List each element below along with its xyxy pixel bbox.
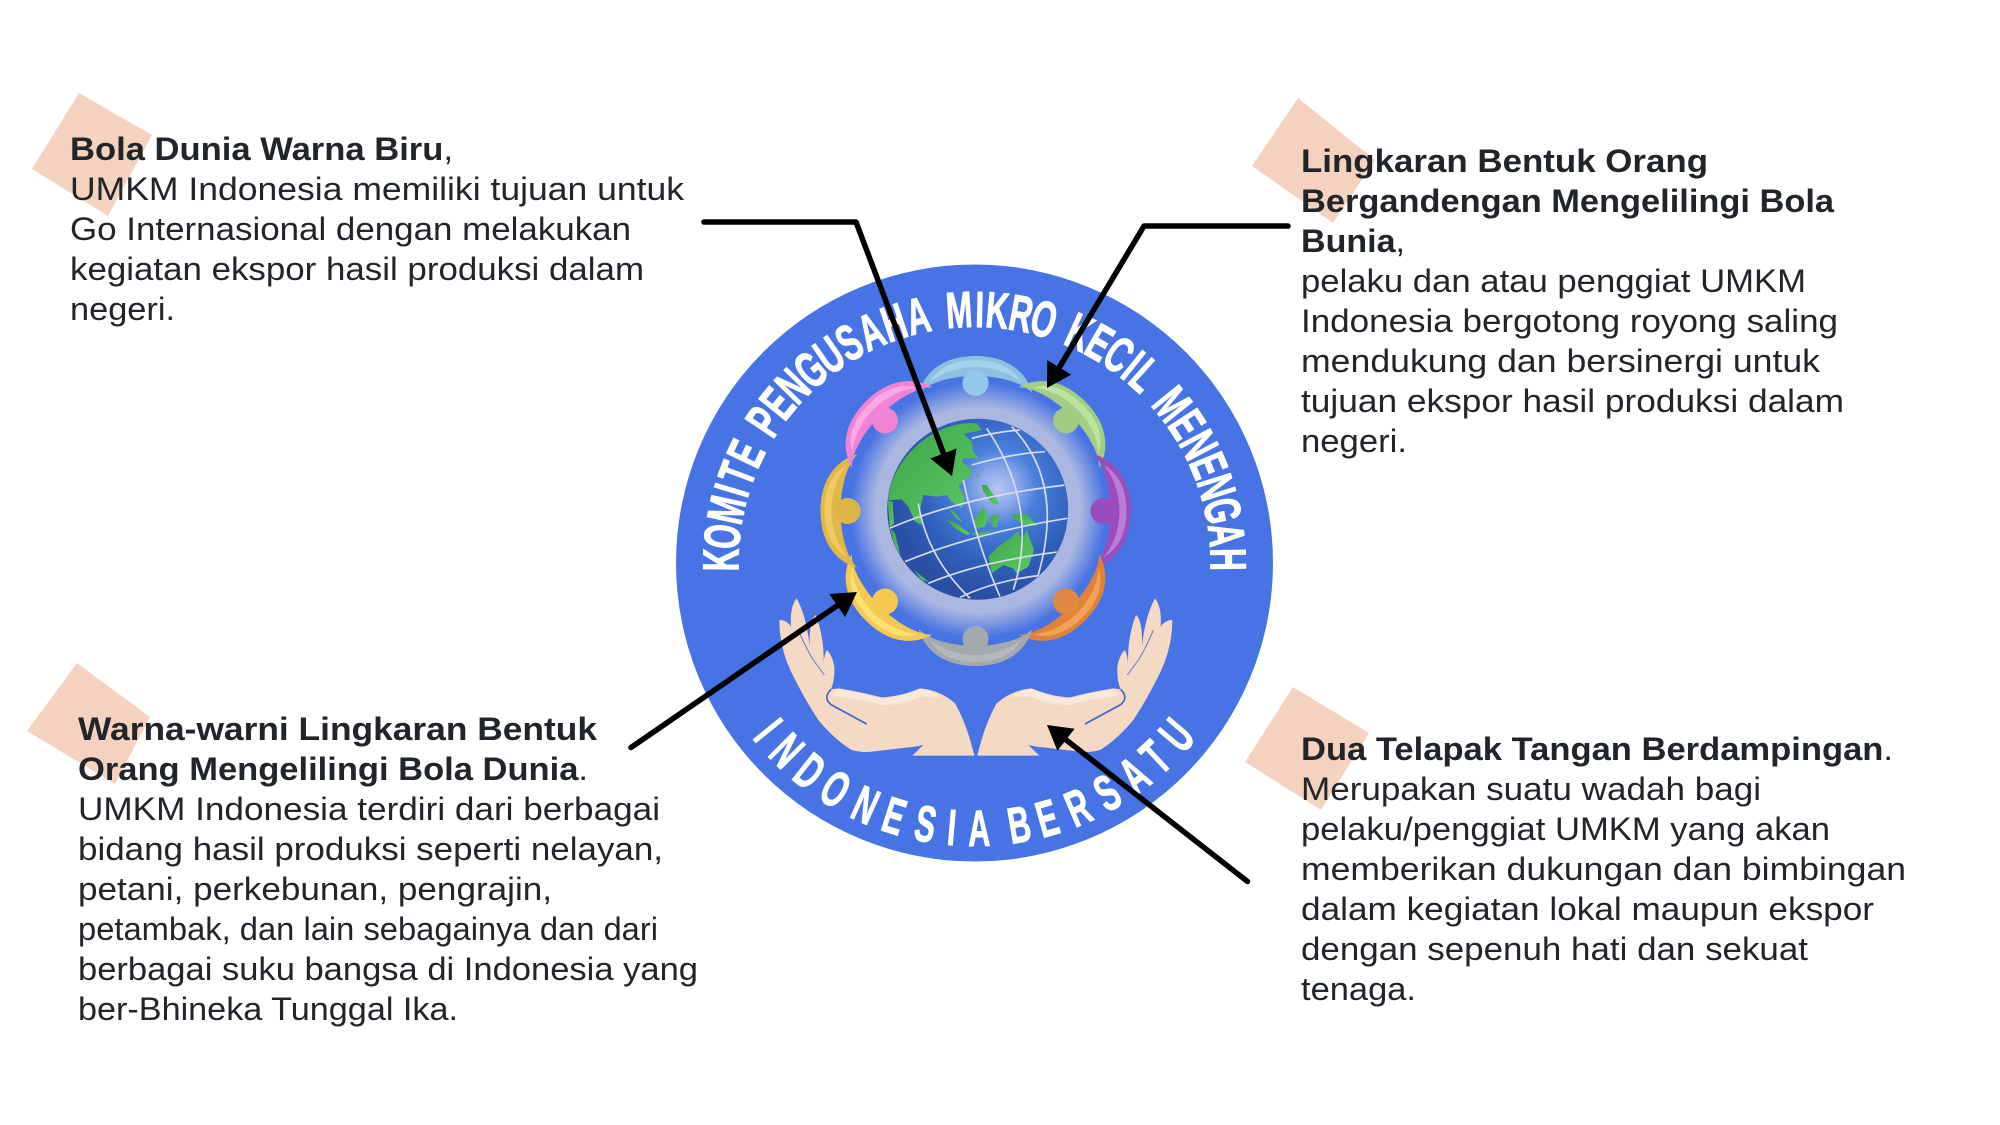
curved title: KOMITE PENGUSAHA MIKRO KECIL MENENGAH: A xyxy=(900,286,935,346)
text block: Warna-warni Lingkaran: petambak, dan lain sebagainya dan dari xyxy=(78,911,658,947)
decorative diamond: top right xyxy=(1252,98,1375,223)
text block: Warna-warni Lingkaran: Orang Mengelilingi Bola Dunia . xyxy=(78,751,588,787)
curved title: KOMITE PENGUSAHA MIKRO KECIL MENENGAH: S xyxy=(826,313,872,372)
text block: Lingkaran Bentuk Orang: Indonesia bergotong royong saling xyxy=(1301,303,1838,339)
curved title: INDONESIA BERSATU: I xyxy=(945,799,958,856)
curved title: KOMITE PENGUSAHA MIKRO KECIL MENENGAH: N xyxy=(1186,468,1247,507)
curved title: KOMITE PENGUSAHA MIKRO KECIL MENENGAH: N xyxy=(1168,422,1229,468)
curved title: INDONESIA BERSATU: A xyxy=(1108,746,1160,804)
text block: Lingkaran Bentuk Orang: Bergandengan Mengelilingi Bola xyxy=(1301,183,1834,219)
curved title: KOMITE PENGUSAHA MIKRO KECIL MENENGAH: E xyxy=(1178,445,1239,486)
curved title: KOMITE PENGUSAHA MIKRO KECIL MENENGAH: E xyxy=(1077,313,1123,372)
curved title: INDONESIA BERSATU: E xyxy=(876,786,913,846)
curved title: INDONESIA BERSATU: O xyxy=(810,759,860,820)
icon: ring of people xyxy=(820,356,1130,666)
curved title: KOMITE PENGUSAHA MIKRO KECIL MENENGAH: I xyxy=(703,478,760,503)
curved title: KOMITE PENGUSAHA MIKRO KECIL MENENGAH: O xyxy=(1024,289,1063,350)
text block: Lingkaran Bentuk Orang: negeri. xyxy=(1301,423,1407,459)
curved title: KOMITE PENGUSAHA MIKRO KECIL MENENGAH: O xyxy=(693,521,752,552)
icon: two open hands xyxy=(779,598,1172,756)
text block: Warna-warni Lingkaran: UMKM Indonesia terdiri dari berbagai xyxy=(78,791,660,827)
curved title: KOMITE PENGUSAHA MIKRO KECIL MENENGAH: R xyxy=(1005,284,1038,344)
curved title: KOMITE PENGUSAHA MIKRO KECIL MENENGAH: H xyxy=(874,292,914,353)
curved title: INDONESIA BERSATU: B xyxy=(1004,795,1035,855)
curved title: KOMITE PENGUSAHA MIKRO KECIL MENENGAH: T xyxy=(707,455,767,493)
curved title: INDONESIA BERSATU: I xyxy=(743,709,793,751)
curved title: KOMITE PENGUSAHA MIKRO KECIL MENENGAH: K xyxy=(1057,302,1102,363)
curved title: INDONESIA BERSATU: A xyxy=(968,800,991,857)
arrow: to globe xyxy=(704,222,957,476)
curved title: INDONESIA BERSATU: U xyxy=(1148,708,1205,762)
arrow: to people ring xyxy=(1047,226,1288,388)
text block: Dua Telapak Tangan: dalam kegiatan lokal maupun ekspor xyxy=(1301,891,1874,927)
text block: Lingkaran Bentuk Orang: tujuan ekspor hasil produksi dalam xyxy=(1301,383,1844,419)
text block: Bola Dunia Warna Biru: kegiatan ekspor hasil produksi dalam xyxy=(70,251,644,287)
text block: Dua Telapak Tangan xyxy=(1301,731,1906,1007)
curved title: KOMITE PENGUSAHA MIKRO KECIL MENENGAH xyxy=(693,281,1256,572)
text block: Warna-warni Lingkaran: Warna-warni Lingkaran Bentuk xyxy=(78,711,597,747)
curved title: INDONESIA BERSATU: N xyxy=(844,775,887,836)
text block: Dua Telapak Tangan: dengan sepenuh hati dan sekuat xyxy=(1301,931,1808,967)
text block: Bola Dunia Warna Biru: UMKM Indonesia memiliki tujuan untuk xyxy=(70,171,685,207)
text block: Bola Dunia Warna Biru: Go Internasional dengan melakukan xyxy=(70,211,631,247)
text block: Warna-warni Lingkaran xyxy=(78,711,698,1027)
curved title: KOMITE PENGUSAHA MIKRO KECIL MENENGAH: U xyxy=(804,325,855,385)
arrow: to colourful circle xyxy=(631,592,857,748)
curved title: KOMITE PENGUSAHA MIKRO KECIL MENENGAH: C xyxy=(1093,325,1144,384)
curved title: KOMITE PENGUSAHA MIKRO KECIL MENENGAH: K xyxy=(984,281,1012,340)
curved title: INDONESIA BERSATU: R xyxy=(1057,777,1100,838)
curved title: KOMITE PENGUSAHA MIKRO KECIL MENENGAH: E xyxy=(1157,400,1216,449)
text block: Bola Dunia Warna Biru: Bola Dunia Warna Biru , xyxy=(70,131,453,167)
curved title: INDONESIA BERSATU: N xyxy=(759,723,815,779)
icon: left hand xyxy=(779,598,974,756)
text block: Dua Telapak Tangan: pelaku/penggiat UMKM yang akan xyxy=(1301,811,1830,847)
curved title: KOMITE PENGUSAHA MIKRO KECIL MENENGAH: M xyxy=(944,281,974,339)
curved title: KOMITE PENGUSAHA MIKRO KECIL MENENGAH: M xyxy=(1142,376,1202,432)
text block: Warna-warni Lingkaran: berbagai suku bangsa di Indonesia yang xyxy=(78,951,698,987)
curved title: KOMITE PENGUSAHA MIKRO KECIL MENENGAH: L xyxy=(1119,348,1171,403)
decorative diamond: top left xyxy=(32,93,152,216)
text block: Dua Telapak Tangan: memberikan dukungan dan bimbingan xyxy=(1301,851,1906,887)
text block: Lingkaran Bentuk Orang: mendukung dan bersinergi untuk xyxy=(1301,343,1821,379)
text block: Dua Telapak Tangan: tenaga. xyxy=(1301,971,1416,1007)
text block: Bola Dunia Warna Biru: negeri. xyxy=(70,291,175,327)
curved title: KOMITE PENGUSAHA MIKRO KECIL MENENGAH: G xyxy=(1192,493,1253,529)
curved title: INDONESIA BERSATU: E xyxy=(1030,788,1065,848)
text block: Lingkaran Bentuk Orang: pelaku dan atau penggiat UMKM xyxy=(1301,263,1806,299)
text block: Lingkaran Bentuk Orang: Bunia, xyxy=(1301,223,1405,259)
text block: Warna-warni Lingkaran: petani, perkebunan, pengrajin, xyxy=(78,871,552,907)
icon: globe xyxy=(886,419,1068,600)
curved title: KOMITE PENGUSAHA MIKRO KECIL MENENGAH: M xyxy=(696,491,757,529)
decorative diamond: bottom left xyxy=(27,663,150,784)
arrow: to hands xyxy=(1047,725,1248,882)
curved title: INDONESIA BERSATU: S xyxy=(910,794,941,854)
curved title: KOMITE PENGUSAHA MIKRO KECIL MENENGAH: E xyxy=(716,432,776,475)
curved title: KOMITE PENGUSAHA MIKRO KECIL MENENGAH: I xyxy=(975,281,985,338)
curved title: KOMITE PENGUSAHA MIKRO KECIL MENENGAH: A xyxy=(1197,520,1256,549)
curved title: INDONESIA BERSATU: D xyxy=(784,742,836,801)
curved title: KOMITE PENGUSAHA MIKRO KECIL MENENGAH: H xyxy=(1200,548,1256,571)
icon: right hand xyxy=(977,598,1172,756)
curved title: INDONESIA BERSATU xyxy=(743,708,1205,857)
text block: Bola Dunia Warna Biru xyxy=(70,131,685,327)
curved title: KOMITE PENGUSAHA MIKRO KECIL MENENGAH: G xyxy=(783,340,838,399)
text block: Lingkaran Bentuk Orang xyxy=(1301,143,1844,459)
text block: Lingkaran Bentuk Orang: Lingkaran Bentuk Orang xyxy=(1301,143,1708,179)
curved title: KOMITE PENGUSAHA MIKRO KECIL MENENGAH: E xyxy=(749,378,806,429)
text block: Warna-warni Lingkaran: bidang hasil produksi seperti nelayan, xyxy=(78,831,663,867)
text block: Dua Telapak Tangan: Dua Telapak Tangan Berdampingan . xyxy=(1301,731,1893,767)
curved title: INDONESIA BERSATU: S xyxy=(1084,763,1130,823)
logo: Komite Pengusaha Mikro Kecil Menengah emblem xyxy=(676,264,1273,862)
curved title: KOMITE PENGUSAHA MIKRO KECIL MENENGAH: N xyxy=(765,358,821,414)
curved title: KOMITE PENGUSAHA MIKRO KECIL MENENGAH: K xyxy=(693,548,749,572)
curved title: INDONESIA BERSATU: T xyxy=(1129,730,1182,784)
curved title: KOMITE PENGUSAHA MIKRO KECIL MENENGAH: I xyxy=(1112,340,1154,390)
curved title: KOMITE PENGUSAHA MIKRO KECIL MENENGAH: P xyxy=(735,397,793,446)
text block: Warna-warni Lingkaran: ber-Bhineka Tunggal Ika. xyxy=(78,991,458,1027)
text block: Dua Telapak Tangan: Merupakan suatu wadah bagi xyxy=(1301,771,1761,807)
decorative diamond: bottom right xyxy=(1245,687,1369,810)
halo behind globe xyxy=(850,382,1106,638)
curved title: KOMITE PENGUSAHA MIKRO KECIL MENENGAH: A xyxy=(849,301,893,362)
